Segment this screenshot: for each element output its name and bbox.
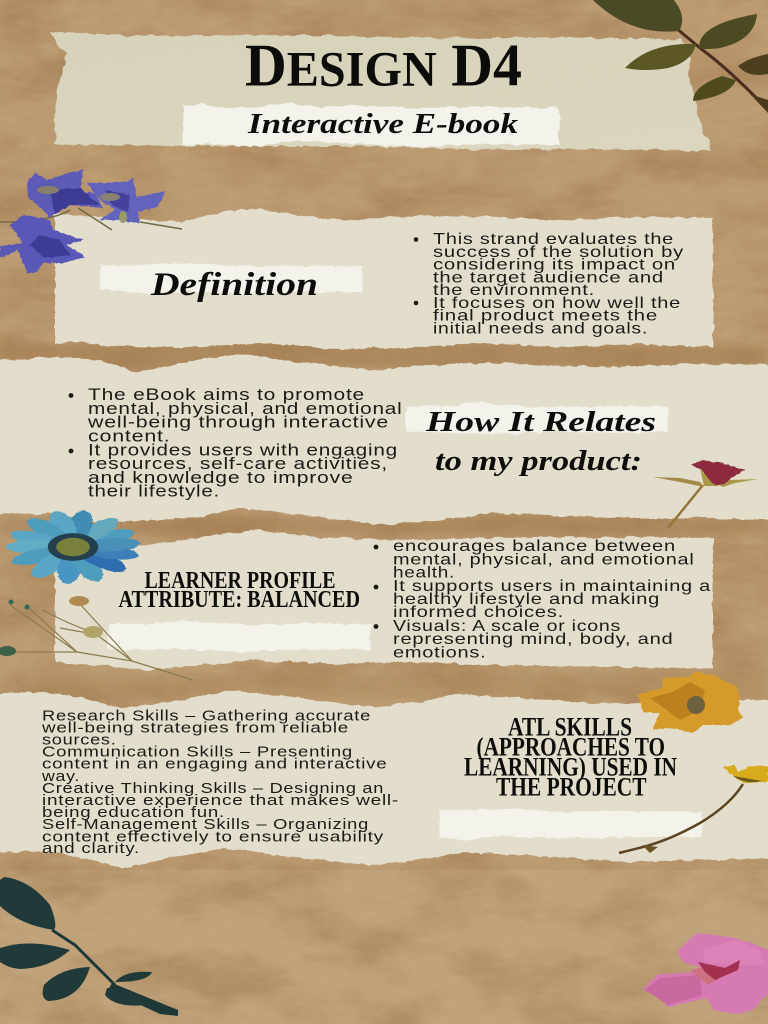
how it relates bullet list: resources, self-care activities, — [88, 455, 388, 473]
learner profile bullet list: It supports users in maintaining a — [393, 578, 711, 595]
how it relates heading: How It Relates — [425, 406, 656, 438]
definition strip — [100, 263, 362, 294]
learner profile heading: ATTRIBUTE: BALANCED — [118, 587, 360, 613]
icon: orange flower — [638, 672, 743, 733]
how it relates bullet list: mental, physical, and emotional — [88, 400, 402, 418]
how it relates bullet list: their lifestyle. — [88, 482, 220, 500]
how it relates bullet list: It provides users with engaging — [88, 442, 398, 460]
panel: definition — [55, 208, 713, 349]
definition bullet list: It focuses on how well the — [433, 295, 681, 312]
ATL skills heading: THE PROJECT — [496, 772, 646, 802]
how it relates bullet list — [69, 386, 402, 500]
icon: dark green leaf branch — [0, 877, 178, 1016]
how it relates bullet list: well-being through interactive — [87, 414, 389, 432]
learner profile bullet list: healthy lifestyle and making — [393, 591, 660, 608]
ATL skills text: content in an engaging and interactive — [42, 756, 388, 772]
ATL skills heading: ATL SKILLS — [508, 712, 632, 742]
ATL skills strip — [439, 808, 702, 840]
panel: learner profile — [55, 530, 713, 670]
learner profile bullet list: mental, physical, and emotional — [393, 552, 694, 568]
ATL skills text: Creative Thinking Skills – Designing an — [42, 780, 384, 797]
icon: yellow flower with stem — [619, 765, 768, 853]
panel: how it relates — [0, 354, 768, 525]
learner profile bullet list: encourages balance between — [393, 538, 676, 555]
how it relates bullet list: content. — [88, 428, 170, 446]
learner profile bullet list: health. — [393, 564, 455, 582]
definition bullet list: considering its impact on — [433, 256, 676, 274]
definition heading: Definition — [150, 267, 318, 303]
definition bullet list: the target audience and — [433, 270, 664, 286]
ATL skills text: well-being strategies from reliable — [41, 720, 349, 736]
learner profile bullet list: Visuals: A scale or icons — [393, 618, 621, 635]
ATL skills heading: (APPROACHES TO — [476, 732, 665, 762]
ATL skills text: Self-Management Skills – Organizing — [42, 816, 369, 833]
title tape panel — [51, 32, 710, 151]
learner profile bullet list: emotions. — [393, 644, 486, 662]
ATL skills text: way. — [41, 768, 80, 785]
definition bullet list: success of the solution by — [433, 244, 684, 261]
definition bullet list: This strand evaluates the — [433, 231, 674, 248]
ATL skills text: content effectively to ensure usability — [42, 828, 384, 846]
ATL skills text: and clarity. — [42, 840, 140, 857]
definition bullet list: the environment. — [433, 282, 595, 299]
title: DESIGN D4 — [245, 32, 522, 98]
definition bullet list — [414, 231, 684, 338]
learner profile strip — [108, 621, 371, 652]
how it relates strip — [406, 403, 668, 434]
how it relates heading — [425, 406, 656, 477]
definition bullet list: final product meets the — [433, 308, 658, 324]
ATL skills heading — [464, 712, 677, 802]
ATL skills heading: LEARNING) USED IN — [464, 752, 677, 782]
subtitle strip — [183, 103, 559, 147]
how it relates bullet list: and knowledge to improve — [88, 469, 354, 487]
learner profile bullet list: informed choices. — [393, 604, 564, 621]
icon: blue daisy — [6, 509, 141, 584]
ATL skills text — [41, 708, 399, 857]
ATL skills text: interactive experience that makes well- — [42, 792, 399, 809]
how it relates heading: to my product: — [435, 445, 642, 477]
how it relates bullet list: The eBook aims to promote — [88, 386, 365, 404]
panel: ATL skills — [0, 691, 768, 868]
subtitle strip: Interactive E-book — [247, 108, 519, 140]
ATL skills text: sources. — [42, 732, 116, 748]
learner profile bullet list: representing mind, body, and — [393, 631, 674, 648]
icon: purple flowers — [0, 170, 182, 273]
icon: top right leaf branch — [593, 0, 768, 113]
icon: rose — [653, 460, 758, 528]
definition bullet list: initial needs and goals. — [433, 320, 648, 338]
ATL skills text: Communication Skills – Presenting — [42, 744, 353, 760]
learner profile heading — [118, 568, 360, 613]
icon: pink flower — [643, 933, 768, 1014]
ATL skills text: Research Skills – Gathering accurate — [42, 708, 371, 724]
learner profile heading: LEARNER PROFILE — [144, 568, 336, 594]
icon: dried twig flowers — [0, 596, 193, 680]
ATL skills text: being education fun. — [42, 804, 225, 821]
learner profile bullet list — [374, 538, 711, 662]
